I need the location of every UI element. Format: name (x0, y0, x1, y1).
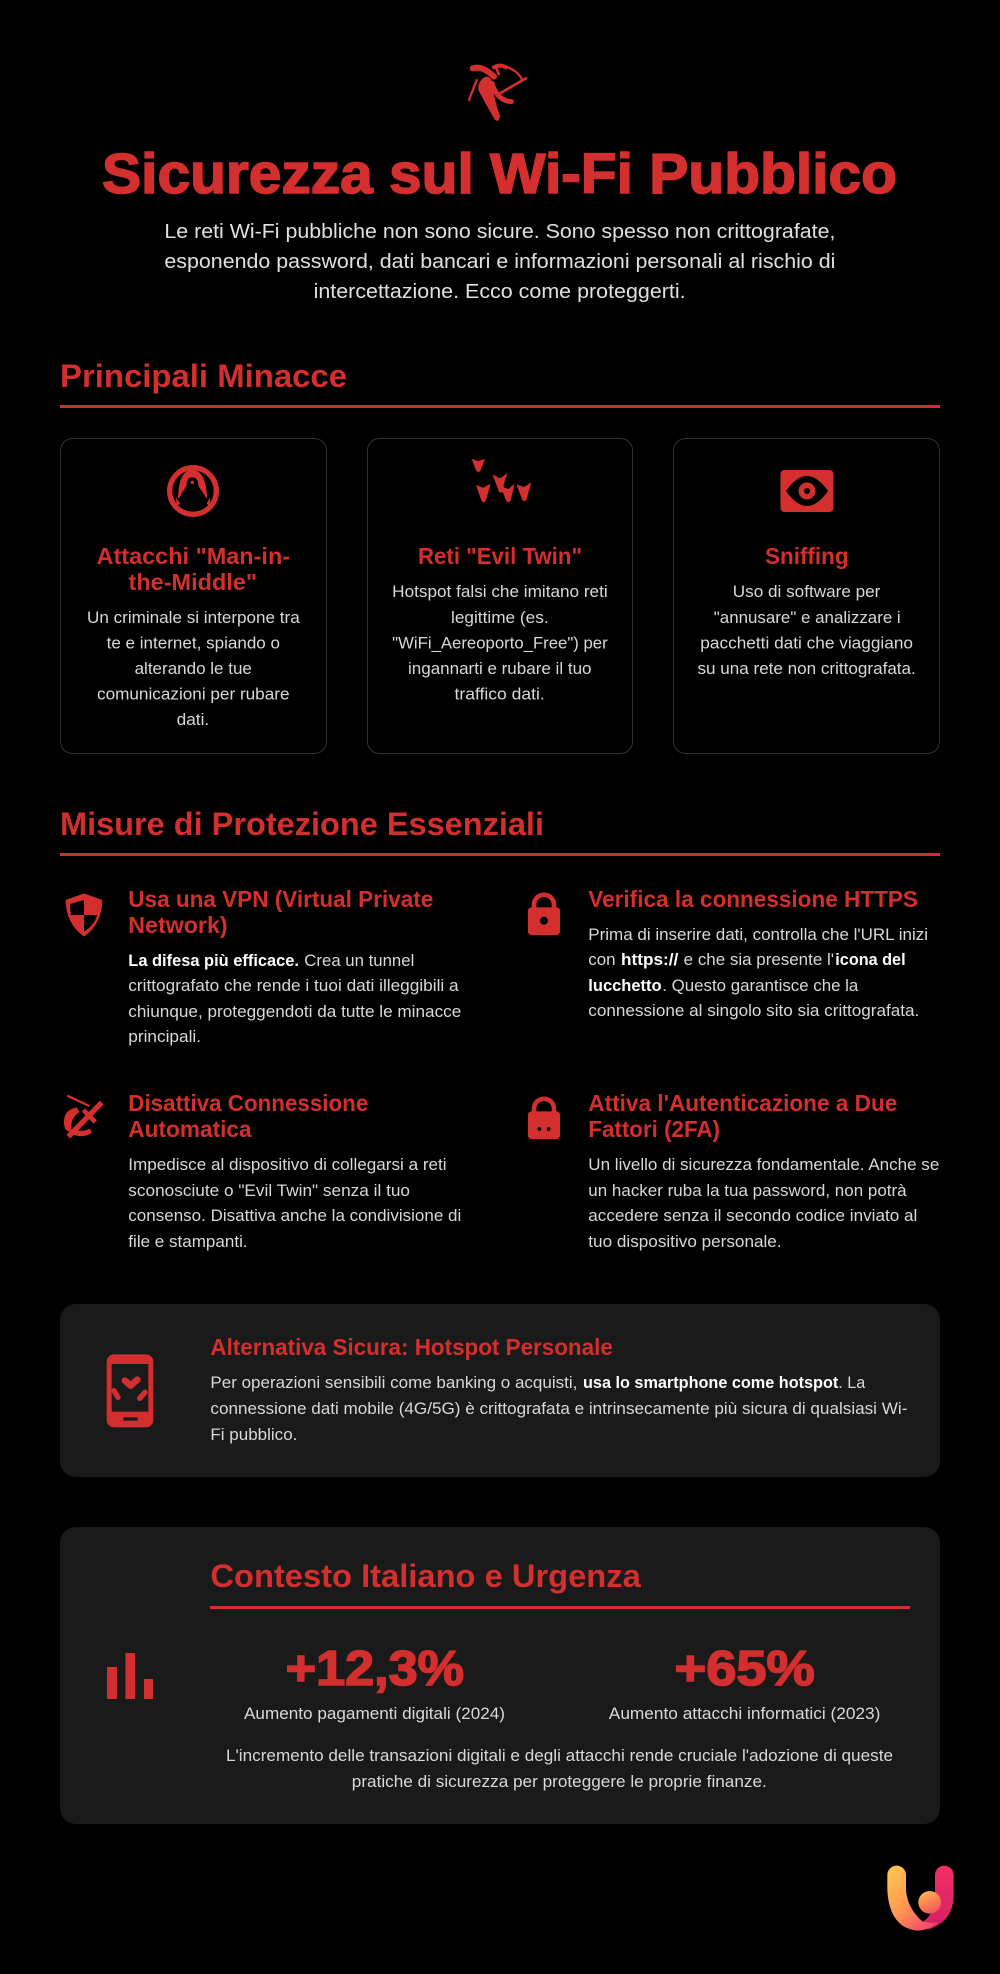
contesto heading: Contesto Italiano e Urgenza (210, 1558, 642, 1594)
card text: ingannarti e rubare il tuo (408, 660, 592, 678)
vpn title: Usa una VPN (Virtual Private (128, 886, 433, 912)
card title: Reti "Evil Twin" (418, 543, 582, 569)
hotspot text: Fi pubblico. (210, 1426, 297, 1444)
heading: misure di protezione (60, 806, 940, 856)
card text: Un criminale si interpone tra (87, 609, 301, 627)
intro text: intercettazione. Ecco come proteggerti. (314, 280, 686, 303)
contesto note: pratiche di sicurezza per proteggere le proprie finanze. (352, 1773, 767, 1791)
two factor title (588, 1090, 897, 1142)
measure: vpn (66, 886, 461, 1046)
card title: the-Middle" (128, 569, 257, 595)
hotspot text: usa lo smartphone come hotspot (583, 1374, 839, 1392)
icon: padlock with dots (528, 1099, 560, 1139)
auto connect text: Impedisce al dispositivo di collegarsi a reti (128, 1156, 447, 1174)
card text: "annusare" e analizzare i (714, 609, 901, 627)
icon: bar chart (107, 1653, 153, 1699)
contesto note (226, 1747, 893, 1791)
vpn text: Crea un tunnel (304, 952, 414, 970)
two factor text: un hacker ruba la tua password, non potrà (588, 1182, 907, 1200)
https text: con (588, 951, 616, 969)
https text: https:// (621, 951, 679, 969)
https title: Verifica la connessione HTTPS (588, 886, 918, 912)
stat: attacchi informatici: +65% (674, 1642, 815, 1696)
auto connect title (128, 1090, 368, 1142)
stat: pagamenti digitali (244, 1642, 505, 1723)
auto connect text (128, 1156, 461, 1251)
contesto note: L'incremento delle transazioni digitali e degli attacchi rende cruciale l'adozione di queste (226, 1747, 893, 1765)
panel: man in the middle (60, 438, 326, 754)
https text: Prima di inserire dati, controlla che l'URL inizi (588, 926, 928, 944)
intro text: esponendo password, dati bancari e informazioni personali al rischio di (164, 250, 835, 273)
icon: eye in frame (780, 470, 834, 512)
vpn text: chiunque, proteggendoti da tutte le minacce (128, 1003, 461, 1021)
card text: comunicazioni per rubare (97, 686, 290, 704)
auto connect title: Automatica (128, 1116, 252, 1142)
two factor title: Attiva l'Autenticazione a Due (588, 1090, 897, 1116)
auto connect title: Disattiva Connessione (128, 1090, 368, 1116)
heading: principali minacce: Principali Minacce (60, 358, 347, 394)
stat: attacchi informatici: Aumento attacchi informatici (2023) (609, 1705, 880, 1723)
logo (887, 1866, 954, 1931)
card text: pacchetti dati che viaggiano (700, 634, 913, 652)
hotspot title: Alternativa Sicura: Hotspot Personale (210, 1334, 613, 1360)
https text: lucchetto (588, 977, 662, 995)
vpn text: crittografato che rende i tuoi dati illeggibili a (128, 977, 459, 995)
card title: Attacchi "Man-in- (96, 543, 290, 569)
intro text: Le reti Wi-Fi pubbliche non sono sicure. Sono spesso non crittografate, (164, 220, 835, 243)
card title: Sniffing (765, 543, 849, 569)
icon: smartphone (107, 1354, 153, 1427)
https text: . Questo garantisce che la (662, 977, 859, 995)
card text (698, 583, 916, 678)
card text: dati. (177, 711, 209, 729)
vpn text: La difesa più efficace. (128, 952, 299, 970)
icon: penguin in ring (170, 468, 216, 514)
icon: shield (66, 893, 102, 937)
hotspot text: . La (838, 1374, 866, 1392)
card text: alterando le tue (135, 660, 252, 678)
vpn title (128, 886, 433, 938)
heading: misure di protezione: Misure di Protezione Essenziali (60, 806, 544, 842)
hotspot text: connessione dati mobile (4G/5G) è crittografata e intrinsecamente più sicura di qualsiasi Wi- (210, 1400, 907, 1418)
stat: pagamenti digitali: +12,3% (286, 1642, 464, 1696)
vpn text (128, 952, 461, 1046)
card text: te e internet, spiando o (107, 634, 280, 652)
card text (392, 583, 608, 704)
auto connect text: sconosciute o "Evil Twin" senza il tuo (128, 1182, 410, 1200)
panel: sniffing (674, 438, 940, 754)
hotspot text: Per operazioni sensibili come banking o acquisti, (210, 1374, 577, 1392)
https text: connessione al singolo sito sia crittografata. (588, 1002, 919, 1020)
icon: header cupid archer (469, 66, 526, 121)
icon: red chevrons (472, 459, 531, 502)
auto connect text: consenso. Disattiva anche la condivisione di (128, 1207, 461, 1225)
card text: traffico dati. (454, 686, 545, 704)
card text: legittime (es. (451, 609, 549, 627)
card text (87, 609, 301, 729)
icon: padlock (528, 895, 560, 935)
heading: principali minacce (60, 358, 940, 408)
two factor text: accedere senza il secondo codice inviato al (588, 1207, 917, 1225)
https text: icona del (835, 951, 906, 969)
card text: su una rete non crittografata. (698, 660, 916, 678)
vpn title: Network) (128, 912, 228, 938)
https text: e che sia presente l' (684, 951, 834, 969)
hotspot text (210, 1374, 907, 1444)
panel: contesto italiano (60, 1527, 940, 1824)
auto connect text: file e stampanti. (128, 1233, 248, 1251)
two factor text: Un livello di sicurezza fondamentale. Anche se (588, 1156, 939, 1174)
measure: auto connect (64, 1090, 461, 1251)
vpn text: principali. (128, 1028, 201, 1046)
card text: Uso di software per (733, 583, 881, 601)
two factor text (588, 1156, 939, 1251)
panel: hotspot personale (60, 1304, 940, 1477)
two factor title: Fattori (2FA) (588, 1116, 720, 1142)
stat: attacchi informatici (609, 1642, 880, 1723)
stat: pagamenti digitali: Aumento pagamenti digitali (2024) (244, 1705, 505, 1723)
card text: Hotspot falsi che imitano reti (392, 583, 608, 601)
card text: "WiFi_Aereoporto_Free") per (392, 634, 608, 652)
card title (96, 543, 290, 595)
contesto heading (210, 1558, 910, 1609)
measure: two factor (528, 1090, 939, 1251)
panel: evil twin (368, 438, 632, 754)
intro text (164, 220, 835, 303)
title: Sicurezza sul Wi-Fi Pubblico (102, 142, 897, 206)
measure: https (528, 886, 928, 1020)
https text (588, 926, 928, 1020)
two factor text: tuo dispositivo personale. (588, 1233, 782, 1251)
icon: crossed-out connection (64, 1096, 102, 1137)
